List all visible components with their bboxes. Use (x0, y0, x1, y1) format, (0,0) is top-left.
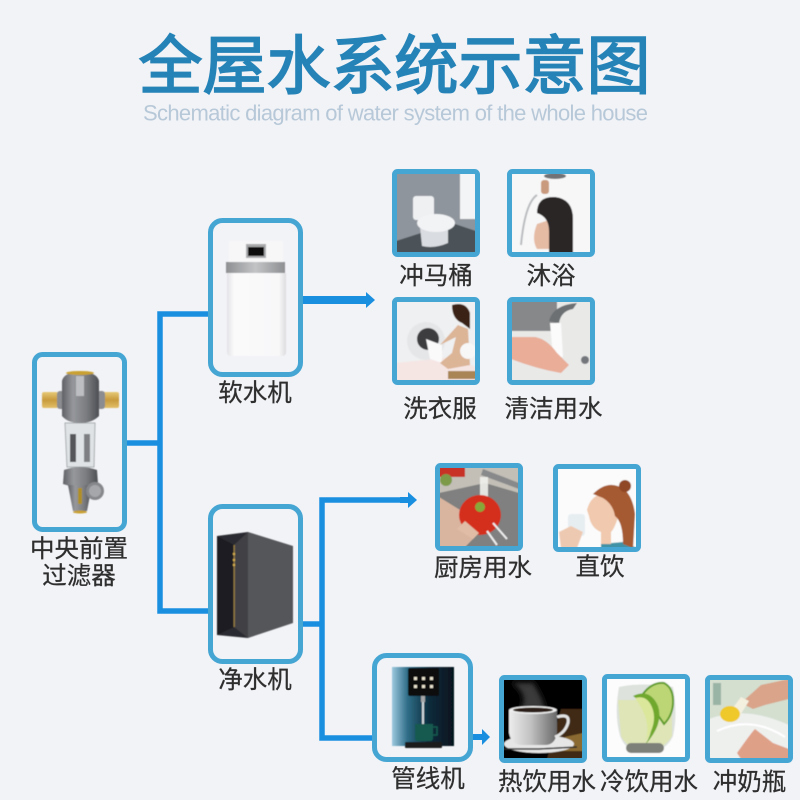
label: water purifier: 净水机 (218, 666, 292, 694)
label: hand washing: 清洁用水 (504, 395, 602, 423)
panel: water purifier (210, 506, 300, 662)
label: cold drinks: 冷饮用水 (600, 768, 698, 796)
label: hot drinks: 热饮用水 (498, 768, 596, 796)
label: water softener: 软水机 (218, 379, 292, 407)
connectors: pipe network (127, 314, 405, 738)
icon: softener product (226, 241, 286, 356)
panel: pipeline tap machine (374, 656, 470, 760)
label: baby bottle: 冲奶瓶 (713, 768, 786, 796)
panel: water softener (210, 220, 300, 374)
photo tile: hot drinks (499, 675, 587, 763)
photo tile: kitchen water (435, 463, 523, 551)
subtitle: Schematic diagram of water system of the whole house (143, 100, 648, 126)
label: showering: 沐浴 (526, 262, 576, 290)
label: laundry: 洗衣服 (403, 395, 477, 423)
panel: central pre-filter (34, 354, 124, 530)
icon: tap machine product (392, 667, 454, 748)
arrow: purifier to kitchen uses (400, 492, 417, 508)
photo tile: cold drinks (602, 674, 690, 762)
arrow: tap machine to drink uses (473, 729, 490, 745)
label: direct drinking: 直饮 (576, 553, 624, 581)
photo tile: toilet flushing (392, 169, 480, 257)
photo tile: showering (507, 169, 595, 257)
icon: purifier product (217, 532, 293, 638)
icon: pre-filter product (42, 371, 119, 514)
label: toilet flushing: 冲马桶 (399, 262, 473, 290)
title: 全屋水系统示意图 (138, 30, 650, 102)
label: filter second line: 过滤器 (42, 562, 116, 590)
photo tile: laundry (392, 297, 480, 385)
label: tap machine: 管线机 (391, 765, 465, 793)
label: kitchen water: 厨房用水 (434, 554, 532, 582)
photo tile: baby bottle (705, 675, 793, 763)
arrow: softener to household uses (303, 292, 375, 308)
photo tile: direct drinking (553, 464, 641, 552)
label: central pre-filter: 中央前置 (30, 535, 128, 563)
photo tile: hand washing (507, 297, 595, 385)
